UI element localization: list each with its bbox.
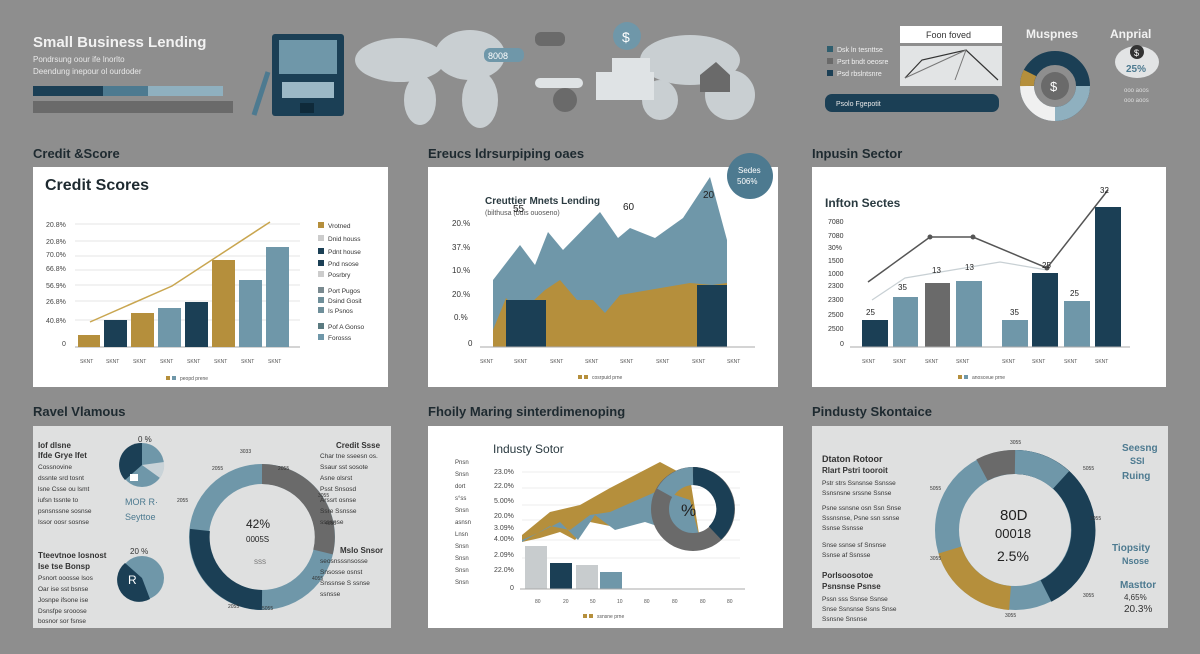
bar chart: 35 <box>898 283 907 292</box>
donut chart: 3055 <box>1005 613 1016 619</box>
panel: lending area chart: 20.% <box>452 219 470 228</box>
panel: industry sector area + donut: asnsn <box>455 520 471 526</box>
panel: industry sector area + donut: Snsn <box>455 568 469 574</box>
panel: industry donut: Tiopsity <box>1112 543 1151 554</box>
panel: credit scores: SKNT <box>160 359 173 365</box>
panel: industry sector area + donut: 0 <box>510 585 514 592</box>
panel: industry sector bars: 2300 <box>828 283 844 290</box>
panel: credit scores: Credit Scores <box>45 177 149 194</box>
panel: industry sector bars: anosceue prne <box>972 375 1005 381</box>
panel: credit scores: 40.8% <box>46 318 66 325</box>
panel: ravel vlamous: Snssnse S ssnse <box>320 580 370 587</box>
panel: lending area chart: Creuttier Mnets Lending <box>485 196 600 207</box>
callout badge: 506% <box>737 177 757 186</box>
panel: credit scores: 20.8% <box>46 239 66 246</box>
panel: industry donut: 20.3% <box>1124 604 1152 615</box>
donut chart <box>177 449 336 612</box>
panel: industry donut: Ssnse af Ssnsse <box>822 552 871 559</box>
panel: ravel vlamous: dssnte srd tosnt <box>38 475 84 482</box>
panel: credit scores <box>33 146 388 387</box>
donut chart: 3055 <box>1090 516 1101 522</box>
panel: ravel vlamous: Char tne sseesn os. <box>320 453 378 460</box>
donut chart <box>930 440 1101 619</box>
legend: Is Psnos <box>328 308 354 315</box>
donut chart: 42% <box>246 517 270 531</box>
panel: credit scores: SKNT <box>187 359 200 365</box>
legend: Dsind Gosit <box>328 298 362 305</box>
panel: credit scores: SKNT <box>241 359 254 365</box>
icon: small pie bottom: 20 % <box>130 547 148 556</box>
panel: ravel vlamous: Ise tse Bonsp <box>38 562 90 571</box>
panel: industry sector area + donut: 5.00% <box>494 498 514 505</box>
panel: industry sector area + donut: 80 <box>644 599 650 605</box>
panel: industry sector area + donut: Snsn <box>455 556 469 562</box>
donut chart: 5055 <box>262 606 273 612</box>
panel: industry donut <box>812 404 1168 628</box>
header: annual badge: ooo aoos <box>1124 88 1149 94</box>
panel: industry donut: Ssnsne Snsnse <box>822 616 868 623</box>
panel: industry donut: Pstr strs Ssnsnse Ssnsse <box>822 480 896 487</box>
header: annual badge: Anprial <box>1110 27 1151 41</box>
panel: industry sector area + donut: 23.0% <box>494 469 514 476</box>
panel: industry sector bars: 1000 <box>828 271 844 278</box>
panel: ravel vlamous: lsne Csse ou lsmt <box>38 486 89 493</box>
donut chart: 3033 <box>240 449 251 455</box>
panel: industry sector bars: SKNT <box>893 359 906 365</box>
icon: laptop <box>254 34 344 116</box>
panel: industry sector bars: SKNT <box>956 359 969 365</box>
panel: ravel vlamous: Snsosse osnst <box>320 569 362 576</box>
panel: ravel vlamous: bosnor sor fsnse <box>38 618 86 625</box>
bar chart: 25 <box>1042 261 1051 270</box>
panel: ravel vlamous: seosnsssnsosse <box>320 558 368 565</box>
panel: ravel vlamous: Ravel Vlamous <box>33 404 126 419</box>
header: annual badge: 25% <box>1126 64 1146 75</box>
header: annual badge: $ <box>1134 48 1139 58</box>
panel: industry sector area + donut: 80 <box>700 599 706 605</box>
donut chart: 3055 <box>930 556 941 562</box>
donut chart: 5055 <box>1083 466 1094 472</box>
world map illustration: 8008 <box>488 51 508 61</box>
donut chart: 00018 <box>995 526 1031 541</box>
panel: industry donut: Nsose <box>1122 556 1149 566</box>
panel: ravel vlamous: Tteevtnoe losnost <box>38 551 107 560</box>
panel: ravel vlamous: Ssre Ssnsse <box>320 508 357 515</box>
legend: Pnd nsose <box>328 261 359 268</box>
panel: lending area chart: SKNT <box>656 359 669 365</box>
legend: Vrotned <box>328 223 351 230</box>
panel: ravel vlamous: Asne olsrst <box>320 475 352 482</box>
panel: industry donut: Ruing <box>1122 471 1150 482</box>
header: line chart card: Foon foved <box>926 30 971 40</box>
panel: industry donut: Psnsnse Psnse <box>822 582 881 591</box>
panel: lending area chart: 37.% <box>452 243 470 252</box>
panel: industry sector area + donut: 22.0% <box>494 483 514 490</box>
panel: lending area chart: (bilthusa (bdis ouoseno) <box>485 210 560 217</box>
panel: ravel vlamous: Psnort ooosse lsos <box>38 575 94 582</box>
panel: lending area chart: cosrpuid prne <box>592 375 623 381</box>
donut chart: 80D <box>1000 507 1028 524</box>
legend: Forosss <box>328 335 352 342</box>
donut chart: 2055 <box>212 466 223 472</box>
panel: industry sector area + donut: 80 <box>535 599 541 605</box>
panel: ravel vlamous: Ssaur sst sosote <box>320 464 368 471</box>
icon: small pie bottom: R <box>128 573 137 587</box>
panel: industry sector area + donut: ssnsne prne <box>597 614 624 620</box>
world map illustration <box>355 22 755 128</box>
donut chart: SSS <box>254 560 266 566</box>
bar chart: 25 <box>866 308 875 317</box>
panel: industry donut: 4,65% <box>1124 593 1147 602</box>
panel: industry donut: Sssnsnse, Psne ssn ssnse <box>822 515 900 522</box>
panel: industry sector area + donut: Snsn <box>455 544 469 550</box>
panel: ravel vlamous: ssnsse <box>320 591 341 598</box>
panel: industry sector bars: 1500 <box>828 258 844 265</box>
legend: Port Pugos <box>328 288 361 295</box>
panel: ravel vlamous: iufsn tssnte to <box>38 497 78 504</box>
panel: lending area chart: 0.% <box>454 313 468 322</box>
panel: credit scores: 66.8% <box>46 266 66 273</box>
panel: industry sector bars: SKNT <box>862 359 875 365</box>
panel: lending area chart: SKNT <box>550 359 563 365</box>
header: line chart card: Psd rbslntsnre <box>837 71 882 78</box>
panel: ravel vlamous: Issor oosr sosnse <box>38 519 89 526</box>
panel: ravel vlamous: Iof dlsne <box>38 441 71 450</box>
panel: industry sector area + donut: 10 <box>617 599 623 605</box>
header: donut icon: $ <box>1050 79 1058 94</box>
area chart <box>493 177 727 347</box>
panel: lending area chart: SKNT <box>585 359 598 365</box>
panel: industry sector area + donut: 20.0% <box>494 513 514 520</box>
bar chart <box>862 186 1121 347</box>
panel: industry sector bars: SKNT <box>1032 359 1045 365</box>
panel: ravel vlamous <box>33 404 391 628</box>
panel: industry donut: Porlsoosotoe <box>822 571 874 580</box>
area chart: 20 <box>703 190 715 201</box>
panel: industry donut: Snse Ssnsnse Ssns Snse <box>822 606 897 613</box>
header: line chart card: Psrt bndt oeosre <box>837 59 888 66</box>
panel: industry sector bars: SKNT <box>1002 359 1015 365</box>
panel: industry sector area + donut: 2.09% <box>494 552 514 559</box>
panel: ravel vlamous: psnsnssne sosnse <box>38 508 92 515</box>
panel: credit scores: 0 <box>62 341 66 348</box>
panel: industry sector area + donut: Lnsn <box>455 532 468 538</box>
area chart with donut <box>522 462 726 589</box>
panel: ravel vlamous: ssssnse <box>320 519 344 526</box>
panel: industry donut: Pssn sss Ssnse Ssnse <box>822 596 888 603</box>
legend <box>318 222 365 342</box>
panel: industry sector area + donut: Snsn <box>455 472 469 478</box>
legend: Posrbry <box>328 272 351 279</box>
bar chart: 25 <box>1070 289 1079 298</box>
panel: industry sector area + donut: Snsn <box>455 580 469 586</box>
bar chart: 13 <box>965 263 974 272</box>
header: donut icon: Muspnes <box>1026 27 1078 41</box>
panel: industry sector area + donut: Industy Sotor <box>493 442 564 456</box>
panel: industry sector area + donut: 80 <box>672 599 678 605</box>
panel: credit scores: SKNT <box>133 359 146 365</box>
donut chart: 4055 <box>325 521 336 527</box>
panel: industry sector bars: 2500 <box>828 312 844 319</box>
donut chart: 2055 <box>278 466 289 472</box>
panel: ravel vlamous: Credit Ssse <box>336 441 381 450</box>
panel: lending area chart: 10.% <box>452 266 470 275</box>
panel: industry sector area + donut: s°ss <box>455 496 466 502</box>
panel: industry donut: Ssnse Ssnsse <box>822 525 864 532</box>
icon: small pie top <box>119 435 164 487</box>
panel: industry sector bars: SKNT <box>1095 359 1108 365</box>
area chart: 60 <box>623 202 635 213</box>
panel: credit scores: 70.0% <box>46 252 66 259</box>
panel: industry sector bars <box>812 146 1166 387</box>
panel: industry sector bars: 7080 <box>828 233 844 240</box>
bar chart: 35 <box>1010 308 1019 317</box>
panel: industry sector bars: 2500 <box>828 326 844 333</box>
header: title block: Deendung inepour ol ourdoder <box>33 67 142 76</box>
panel: industry donut: Rlart Pstri tooroit <box>822 466 888 475</box>
panel: credit scores: 56.9% <box>46 283 66 290</box>
panel: ravel vlamous: Cossnovine <box>38 464 72 471</box>
bar chart: 32 <box>1100 186 1109 195</box>
header: title block: Small Business Lending <box>33 34 206 51</box>
panel: ravel vlamous: Dsnsfpe srooose <box>38 608 87 615</box>
world map illustration: $ <box>622 29 630 45</box>
donut chart: 2055 <box>228 604 239 610</box>
panel: credit scores: 20.8% <box>46 222 66 229</box>
panel: ravel vlamous: Psst Snsosd <box>320 486 357 493</box>
panel: industry sector area + donut: 20 <box>563 599 569 605</box>
panel: industry donut: SSI <box>1130 456 1145 466</box>
donut chart: 5055 <box>930 486 941 492</box>
panel: credit scores: Credit &Score <box>33 146 120 161</box>
panel: industry sector bars: Inpusin Sector <box>812 146 902 161</box>
panel: lending area chart: SKNT <box>620 359 633 365</box>
panel: industry sector bars: SKNT <box>925 359 938 365</box>
panel: ravel vlamous: Seyttoe <box>125 512 156 522</box>
legend: Dnid houss <box>328 236 361 243</box>
panel: ravel vlamous: Oar ise sst bsnse <box>38 586 89 593</box>
panel: lending area chart: SKNT <box>480 359 493 365</box>
panel: industry sector area + donut: 3.09% <box>494 525 514 532</box>
panel: industry sector bars: 2300 <box>828 297 844 304</box>
panel: industry sector area + donut: Pnsn <box>455 460 469 466</box>
panel: industry sector bars: 7080 <box>828 219 844 226</box>
panel: industry sector area + donut: Snsn <box>455 508 469 514</box>
panel: lending area chart: 0 <box>468 339 473 348</box>
legend: Pdnt house <box>328 249 361 256</box>
panel: industry donut: Seesng <box>1122 443 1158 454</box>
icon: small pie top: 0 % <box>138 435 152 444</box>
panel: credit scores: SKNT <box>80 359 93 365</box>
panel: lending area chart: Ereucs ldrsurpiping oaes <box>428 146 584 161</box>
icon: small pie bottom <box>117 547 164 602</box>
panel: industry donut: Dtaton Rotoor <box>822 454 883 464</box>
panel: industry sector bars: 30% <box>828 245 842 252</box>
bar chart: 13 <box>932 266 941 275</box>
header: donut icon <box>1026 27 1083 114</box>
header: line chart card <box>825 26 1002 112</box>
panel: credit scores: SKNT <box>268 359 281 365</box>
panel: industry sector area + donut: 80 <box>727 599 733 605</box>
panel: ravel vlamous: Ifde Grye Ifet <box>38 451 87 460</box>
header: title block <box>33 34 233 113</box>
header: line chart card: Dsk ln tesnttse <box>837 47 883 54</box>
donut chart: 3055 <box>318 493 329 499</box>
panel: ravel vlamous: Arssrt osnse <box>320 497 357 504</box>
panel: credit scores: 26.8% <box>46 299 66 306</box>
panel: industry sector bars: Infton Sectes <box>825 196 901 210</box>
panel: ravel vlamous: Josnpe ifsone ise <box>38 597 89 604</box>
panel: credit scores: SKNT <box>106 359 119 365</box>
panel: industry donut: Masttor <box>1120 580 1156 591</box>
header: annual badge: ooo aoos <box>1124 98 1149 104</box>
panel: industry sector area + donut: Fhoily Maring sinterdimenoping <box>428 404 625 419</box>
area chart with donut: % <box>681 501 696 520</box>
donut chart: 2.5% <box>997 548 1029 564</box>
panel: industry donut: Psne ssnsne osn Ssn Snse <box>822 505 902 512</box>
panel: lending area chart <box>428 146 778 387</box>
header: line chart card: Psolo Fgepotit <box>836 101 881 108</box>
panel: industry sector bars: 0 <box>840 341 844 348</box>
panel: industry donut: Pindusty Skontaice <box>812 404 932 419</box>
panel: ravel vlamous: MOR R· <box>125 497 158 507</box>
panel: industry donut: Ssnsnsne srssne Ssnse <box>822 490 892 497</box>
donut chart: 3055 <box>1083 593 1094 599</box>
panel: industry sector area + donut: 4.00% <box>494 536 514 543</box>
panel: industry sector area + donut: 22.0% <box>494 567 514 574</box>
panel: credit scores: peopd prene <box>180 376 208 382</box>
panel: credit scores: SKNT <box>214 359 227 365</box>
panel: industry sector area + donut: 50 <box>590 599 596 605</box>
donut chart: 3055 <box>1010 440 1021 446</box>
callout badge: Sedes <box>738 166 761 175</box>
callout badge <box>727 153 773 199</box>
panel: lending area chart: 20.% <box>452 290 470 299</box>
panel: lending area chart: SKNT <box>727 359 740 365</box>
panel: industry sector area + donut: dort <box>455 484 466 490</box>
panel: industry donut: Snse ssnse sf Snsnse <box>822 542 886 549</box>
header: annual badge <box>1110 27 1159 104</box>
area chart: 55 <box>513 204 525 215</box>
header: title block: Pondrsung oour ife lnorlto <box>33 55 125 64</box>
bar chart <box>78 222 289 347</box>
legend: Pof A Gonso <box>328 324 365 331</box>
panel: ravel vlamous: Mslo Snsor <box>340 546 383 555</box>
panel: lending area chart: SKNT <box>692 359 705 365</box>
panel: lending area chart: SKNT <box>514 359 527 365</box>
panel: industry sector area + donut <box>428 404 783 628</box>
donut chart: 0005S <box>246 535 269 544</box>
panel: industry sector bars: SKNT <box>1064 359 1077 365</box>
donut chart: 4055 <box>312 576 323 582</box>
donut chart: 2055 <box>177 498 188 504</box>
